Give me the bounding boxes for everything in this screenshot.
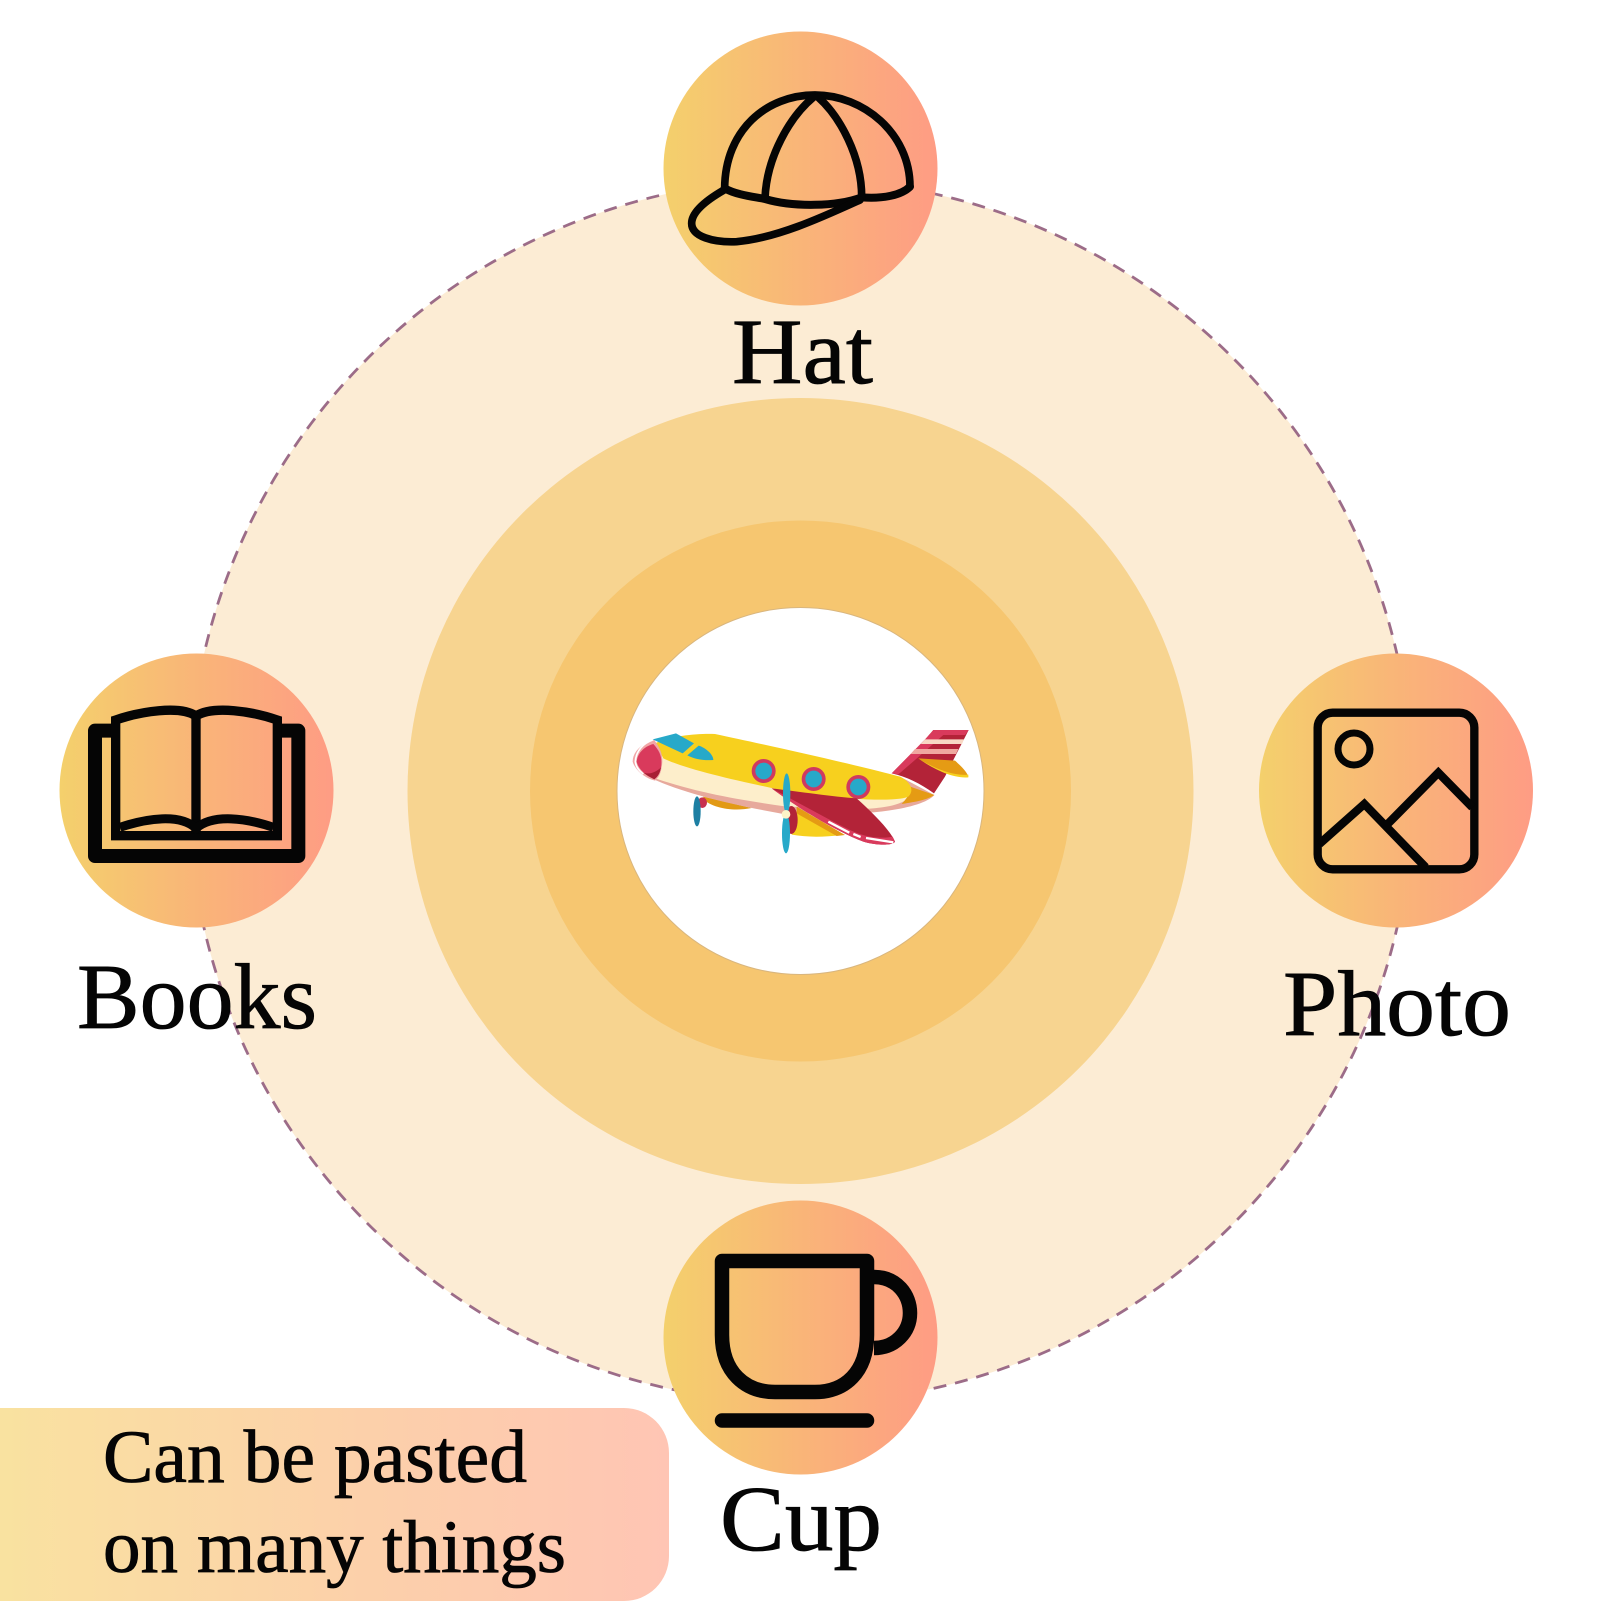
cup badge <box>664 1200 938 1474</box>
icon: airplane <box>633 730 969 853</box>
callout <box>0 1408 669 1601</box>
node: cup <box>664 1200 938 1571</box>
icon: hat <box>692 95 910 242</box>
label: hat: Hat <box>732 301 873 404</box>
label: books: Books <box>77 946 317 1049</box>
callout background <box>0 1408 669 1601</box>
node: photo <box>1259 654 1533 1056</box>
callout text: Can be pasted <box>103 1416 527 1499</box>
outer ring with dashed border <box>188 179 1412 1403</box>
node: books <box>60 654 334 1049</box>
label: cup: Cup <box>720 1468 882 1571</box>
icon: open book <box>95 710 298 856</box>
center white disc <box>617 608 984 974</box>
node: hat <box>664 32 938 404</box>
hat badge <box>664 32 938 306</box>
photo badge <box>1259 654 1533 928</box>
icon: cup <box>722 1261 910 1420</box>
icon: picture <box>1318 713 1474 869</box>
inner ring <box>530 520 1071 1062</box>
middle ring <box>408 398 1194 1184</box>
label: photo: Photo <box>1283 953 1511 1056</box>
callout text <box>103 1416 566 1589</box>
callout text: on many things <box>103 1506 566 1589</box>
books badge <box>60 654 334 928</box>
